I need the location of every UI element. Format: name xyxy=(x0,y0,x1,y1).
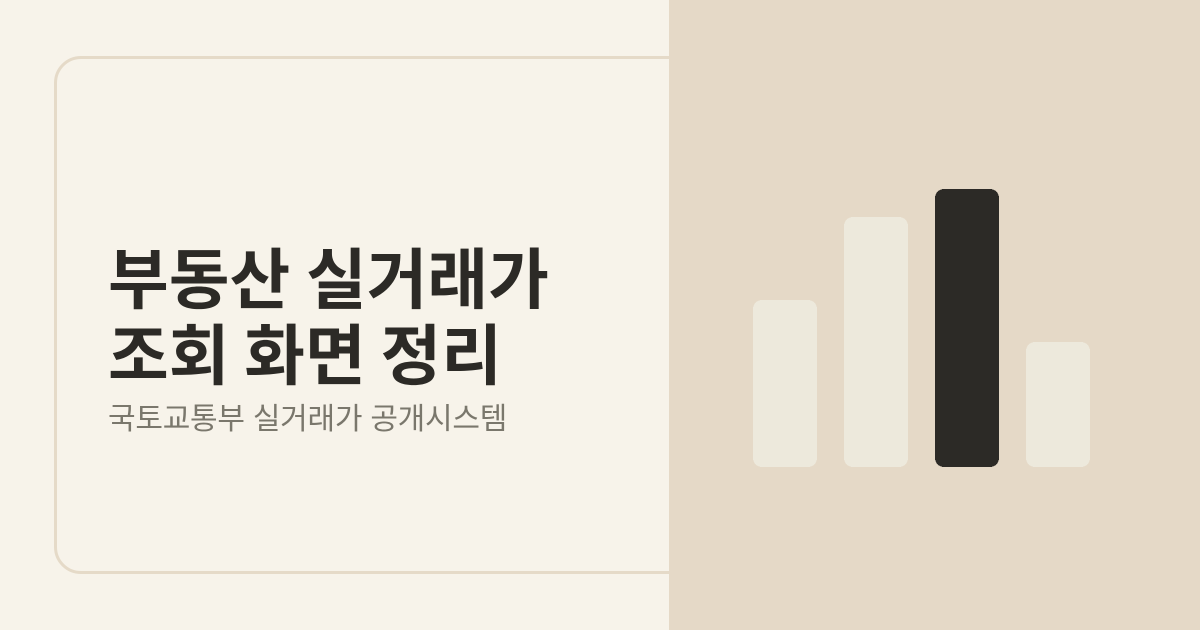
title xyxy=(108,243,549,393)
title: 부동산 실거래가 xyxy=(108,243,549,317)
bar chart xyxy=(753,189,1090,467)
subtitle: 국토교통부 실거래가 공개시스템 xyxy=(108,403,507,436)
title: 조회 화면 정리 xyxy=(108,319,502,393)
panel: right beige panel xyxy=(669,0,1200,630)
panel: outlined card xyxy=(54,56,754,574)
bar 1 xyxy=(753,300,817,467)
bar 4 xyxy=(1026,342,1090,467)
bar 3 highlighted xyxy=(935,189,999,467)
bar 2 xyxy=(844,217,908,467)
